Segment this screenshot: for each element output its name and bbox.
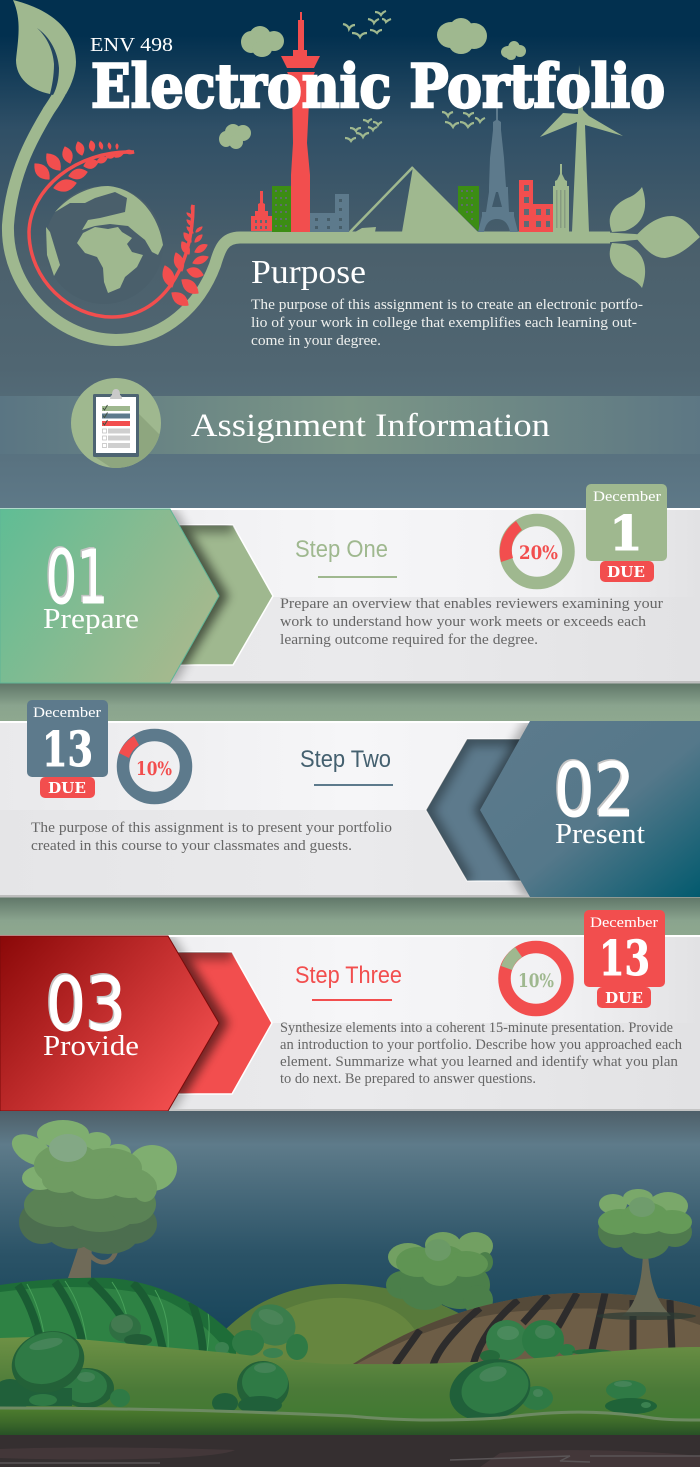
donut chart: 10%: 10% — [518, 970, 554, 992]
grey building — [310, 194, 349, 232]
step description: The purpose of this assignment is to present your portfolio — [31, 820, 392, 836]
step description: learning outcome required for the degree. — [280, 632, 538, 648]
step heading — [295, 536, 397, 578]
date card: December 13: DUE — [48, 779, 86, 797]
tree: right — [596, 1189, 696, 1320]
step number — [44, 534, 108, 621]
birds — [343, 11, 485, 141]
panel: step two — [0, 700, 700, 898]
date card: December 13: December — [33, 705, 101, 721]
banner heading: Assignment Information — [191, 408, 550, 444]
header background — [0, 0, 700, 510]
clouds — [219, 18, 526, 149]
tab shadow — [171, 510, 228, 681]
tree: centre — [386, 1232, 493, 1315]
icon: clipboard badge — [71, 378, 161, 468]
step heading — [300, 746, 393, 786]
date card: December 13 — [27, 700, 108, 798]
step description: work to understand how your work meets or exceeds each — [280, 614, 647, 630]
meadow — [0, 1337, 700, 1425]
green building — [272, 186, 291, 232]
purpose body: come in your degree. — [251, 333, 381, 349]
grass ridge — [0, 1408, 700, 1436]
icon: globe — [45, 186, 163, 304]
step heading — [295, 962, 402, 1001]
date card: December 1 — [586, 484, 667, 582]
date card: December 1: December — [593, 489, 661, 505]
step label: Present — [555, 818, 645, 850]
step description: Synthesize elements into a coherent 15-minute presentation. Provide — [280, 1020, 673, 1036]
chevron — [176, 952, 272, 1094]
date card: December 13: DUE — [605, 989, 643, 1007]
hill: olive highlight — [240, 1298, 420, 1365]
step heading: Step Three — [295, 962, 402, 989]
step number: 03 — [46, 962, 126, 1048]
purpose text — [251, 254, 643, 349]
Eiffel tower — [478, 108, 518, 232]
step label: Prepare — [43, 603, 139, 635]
step description — [31, 820, 392, 854]
step number: 02 — [552, 746, 634, 832]
step heading: Step Two — [300, 746, 391, 773]
step number: 01 — [46, 535, 108, 621]
step number: 03 — [44, 960, 124, 1046]
step number: 02 — [554, 748, 635, 834]
date card: December 13 — [584, 910, 665, 1008]
assignment information banner — [0, 378, 700, 468]
chevron — [176, 525, 273, 665]
arrow tab: prepare — [0, 509, 219, 683]
panel: step one — [0, 484, 700, 684]
tan skyscraper — [553, 164, 569, 232]
hill: striped green — [0, 1278, 236, 1354]
course label: ENV 498 — [90, 34, 173, 56]
chevron — [426, 739, 525, 881]
donut chart: 20%: 20% — [519, 542, 558, 564]
hill: striped brown — [353, 1293, 700, 1364]
icon: top leaf — [13, 0, 76, 95]
date card: December 13: 13 — [599, 931, 650, 987]
donut chart: 20% — [500, 520, 568, 583]
title block — [90, 34, 665, 122]
date card: December 1: 1 — [609, 506, 643, 562]
tower — [281, 12, 320, 232]
step description: Prepare an overview that enables reviewers examining your — [280, 596, 663, 612]
small red building — [251, 191, 272, 231]
sky — [0, 1111, 700, 1371]
step description: to do next. Be prepared to answer questions. — [280, 1071, 536, 1087]
step description: an introduction to your portfolio. Describe how you approached each — [280, 1037, 683, 1053]
step number: 01 — [44, 534, 106, 620]
hill: olive — [225, 1284, 470, 1370]
vine stem and ground line — [8, 60, 610, 340]
tree: left — [6, 1120, 177, 1278]
step label: Provide — [43, 1030, 139, 1062]
step heading: Step One — [295, 536, 388, 563]
purpose body: lio of your work in college that exemplifies each learning out- — [251, 315, 637, 331]
wheat wreath — [29, 141, 208, 317]
date card: December 13: December — [590, 915, 658, 931]
donut chart: 10% — [119, 735, 186, 798]
green building behind pyramid — [458, 186, 479, 232]
hero illustration: vine, globe and skyline — [8, 0, 700, 340]
red building — [519, 180, 553, 232]
purpose heading: Purpose — [251, 254, 366, 291]
section gaps — [0, 683, 700, 721]
bushes in foreground — [0, 1321, 657, 1430]
donut chart: 10% — [501, 947, 568, 1010]
step description — [280, 596, 663, 648]
branch leaves — [600, 187, 700, 288]
date card: December 1: DUE — [607, 563, 645, 581]
panel: step three — [0, 910, 700, 1112]
wind turbine — [540, 65, 623, 232]
tab shadow — [472, 723, 529, 895]
bushes on far hills — [109, 1297, 612, 1362]
step description — [280, 1020, 683, 1087]
purpose body: The purpose of this assignment is to create an electronic portfo- — [251, 297, 643, 313]
landscape illustration — [0, 1111, 700, 1467]
purpose body — [251, 297, 643, 349]
step description: element. Summarize what you learned and identify what you plan — [280, 1054, 679, 1070]
arrow tab: provide — [0, 936, 219, 1111]
tab shadow — [169, 937, 228, 1109]
donut chart: 10%: 10% — [136, 758, 172, 780]
step description: created in this course to your classmates and guests. — [31, 838, 352, 854]
soil — [0, 1435, 700, 1467]
arrow tab: present — [480, 721, 700, 897]
date card: December 13: 13 — [42, 722, 93, 778]
pyramid — [350, 167, 478, 232]
